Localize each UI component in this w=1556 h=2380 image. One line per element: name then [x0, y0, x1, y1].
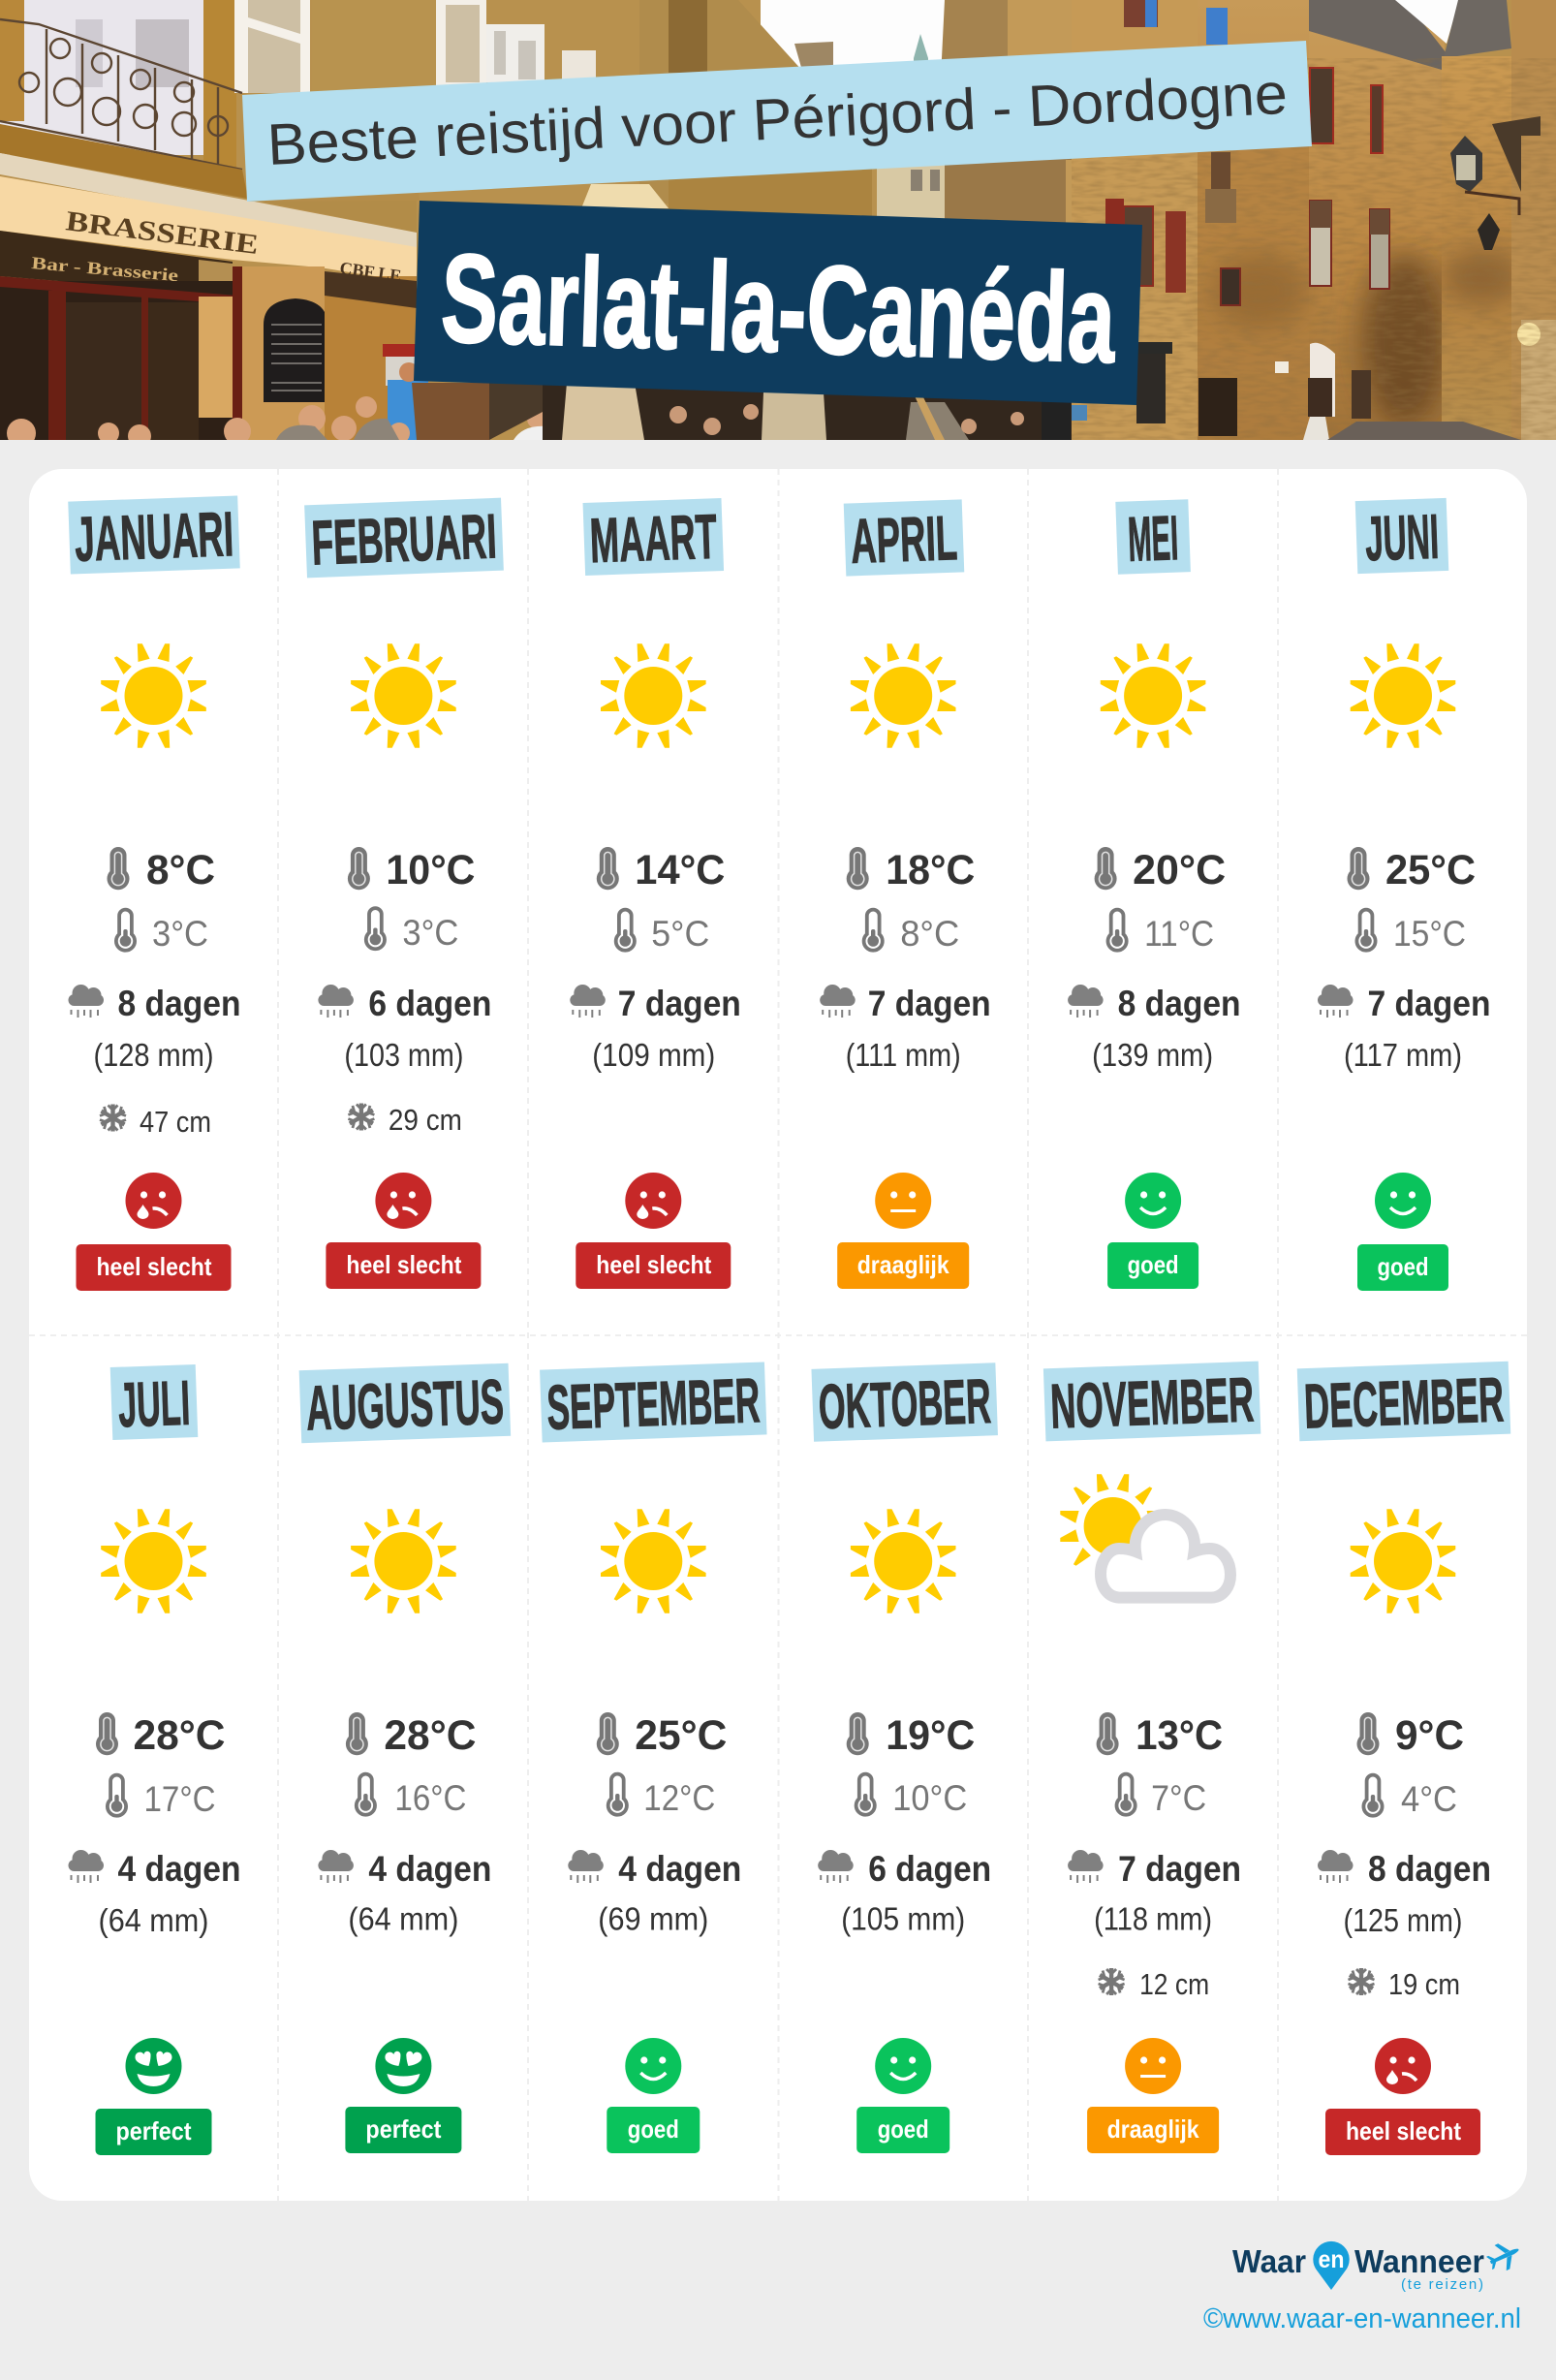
- rain days: [68, 1849, 240, 1889]
- heading: juni: JUNI: [1364, 501, 1440, 574]
- rainfall: (103 mm): [344, 1037, 463, 1073]
- rainfall: (105 mm): [841, 1901, 965, 1936]
- max temperature: 18°C: [886, 847, 975, 893]
- min temperature: 3°C: [152, 914, 208, 954]
- max temperature: 25°C: [635, 1712, 727, 1759]
- rating badge: heel slecht: [97, 1252, 212, 1281]
- min temperature: 7°C: [1151, 1778, 1206, 1818]
- max temperature: [1356, 1712, 1464, 1759]
- rain days: [68, 984, 240, 1023]
- rating badge: draaglijk: [1107, 2114, 1199, 2144]
- max temperature: 10°C: [386, 847, 475, 893]
- icon: sun: [1351, 1509, 1455, 1613]
- min temperature: [366, 908, 458, 953]
- rating badge: goed: [878, 2114, 929, 2144]
- max temperature: 13°C: [1136, 1712, 1223, 1759]
- month: april: [820, 499, 991, 1289]
- rain days: [1068, 984, 1241, 1023]
- title banner: [414, 201, 1142, 405]
- max temperature: 9°C: [1395, 1712, 1464, 1759]
- rating face: [1125, 1173, 1181, 1229]
- rating badge: [576, 1242, 731, 1289]
- snow: [1099, 1967, 1209, 2001]
- logo: Waar en Wanneer: [1232, 2237, 1525, 2293]
- heading: september: [540, 1362, 767, 1443]
- snow: [100, 1105, 211, 1139]
- rain days: 7 dagen: [618, 984, 741, 1023]
- heading: oktober: [811, 1362, 998, 1442]
- rain days: [820, 984, 991, 1023]
- month: augustus: [299, 1363, 511, 2153]
- rating face: [1125, 2038, 1181, 2094]
- rating badge: [1357, 1244, 1448, 1291]
- rating badge: [95, 2109, 211, 2155]
- rainfall: (64 mm): [99, 1902, 209, 1938]
- subtitle banner: [242, 41, 1312, 202]
- rating badge: [856, 2107, 949, 2153]
- min temperature: 3°C: [402, 913, 458, 953]
- rating badge: [1325, 2109, 1480, 2155]
- month: september: [540, 1362, 767, 2153]
- rain days: 8 dagen: [1118, 984, 1241, 1023]
- month: juni: [1318, 498, 1490, 1291]
- shop front: [0, 281, 242, 440]
- heading: maart: [583, 498, 724, 576]
- rating badge: goed: [1128, 1250, 1179, 1279]
- rating badge: perfect: [116, 2116, 192, 2145]
- min temperature: [864, 910, 959, 954]
- awning sub lettering: Bar - Brasserie: [31, 253, 179, 285]
- header photo: Sarlat street: CBF LE: [338, 258, 402, 286]
- rainfall: (117 mm): [1344, 1037, 1462, 1073]
- month: november: [1043, 1362, 1260, 2153]
- website credit: ©www.waar-en-wanneer.nl: [1203, 2303, 1521, 2334]
- rain days: 7 dagen: [1368, 984, 1490, 1023]
- rating face: [375, 1173, 431, 1229]
- rain days: 6 dagen: [868, 1849, 991, 1889]
- rating face: [625, 2038, 681, 2094]
- rainfall: (139 mm): [1092, 1037, 1213, 1073]
- sill and awning: [0, 124, 248, 199]
- min temperature: 17°C: [143, 1779, 215, 1819]
- min temperature: 5°C: [651, 914, 709, 954]
- max temperature: [1097, 1712, 1223, 1759]
- max temperature: [1347, 847, 1476, 893]
- icon: sun: [1101, 643, 1205, 748]
- rainfall: (69 mm): [598, 1901, 708, 1936]
- max temperature: [847, 847, 975, 893]
- max temperature: 25°C: [1385, 847, 1476, 893]
- icon: sun: [101, 1509, 206, 1613]
- min temperature: [616, 910, 709, 954]
- rain days: 4 dagen: [118, 1849, 240, 1889]
- rating face: [126, 1173, 182, 1229]
- max temperature: [107, 847, 215, 893]
- title text: Sarlat-la-Canéda: [439, 227, 1119, 390]
- min temperature: [856, 1774, 967, 1818]
- heading: januari: [68, 495, 240, 575]
- icon: sun: [601, 1509, 706, 1613]
- max temperature: 28°C: [384, 1712, 476, 1759]
- rain days: [1318, 984, 1490, 1023]
- min temperature: [357, 1774, 466, 1818]
- heading: juli: JULI: [117, 1367, 191, 1440]
- icon: sun behind cloud: [1060, 1474, 1230, 1598]
- header photo: Sarlat street: [0, 0, 1556, 448]
- stone texture: [1072, 58, 1556, 440]
- heading: november: NOVEMBER: [1049, 1363, 1255, 1442]
- heading: mei: [1115, 499, 1191, 575]
- sign lettering: BRASSERIE: [64, 205, 261, 261]
- max temperature: 19°C: [886, 1712, 975, 1759]
- balcony ironwork: [0, 19, 242, 170]
- min temperature: [1116, 1774, 1206, 1818]
- rating face: [1375, 2038, 1431, 2094]
- rain days: 4 dagen: [618, 1849, 741, 1889]
- rating badge: [1087, 2107, 1219, 2153]
- rating badge: perfect: [365, 2114, 442, 2144]
- icon: sun: [601, 643, 706, 748]
- icon: sun: [851, 1509, 955, 1613]
- heading: februari: FEBRUARI: [310, 500, 498, 579]
- heading: april: APRIL: [850, 502, 958, 577]
- min temperature: [1108, 910, 1214, 954]
- rain days: 8 dagen: [118, 984, 240, 1023]
- rating face: [1375, 1173, 1431, 1229]
- rating face: [875, 2038, 931, 2094]
- rating badge: heel slecht: [596, 1250, 712, 1279]
- snow: 29 cm: [389, 1103, 462, 1137]
- icon: sun: [1351, 643, 1455, 748]
- rainfall: (64 mm): [348, 1901, 458, 1936]
- rainfall: (128 mm): [93, 1037, 213, 1073]
- min temperature: [608, 1774, 715, 1818]
- rating face: [875, 1173, 931, 1229]
- rating face: [375, 2038, 431, 2094]
- min temperature: [1356, 910, 1466, 954]
- rain days: [570, 984, 741, 1023]
- month: december: [1297, 1362, 1510, 2155]
- heading: juli: [110, 1364, 198, 1441]
- month: maart: [570, 498, 741, 1289]
- rain days: [1318, 1849, 1491, 1889]
- snow: 19 cm: [1388, 1967, 1460, 2001]
- max temperature: [597, 847, 725, 893]
- right buildings: [1198, 0, 1309, 440]
- min temperature: 16°C: [394, 1778, 466, 1818]
- min temperature: 15°C: [1393, 914, 1466, 954]
- min temperature: 10°C: [892, 1778, 967, 1818]
- rain days: 7 dagen: [868, 984, 991, 1023]
- heading: november: [1043, 1362, 1260, 1442]
- min temperature: [1363, 1775, 1457, 1819]
- rain days: 6 dagen: [368, 984, 491, 1023]
- crowd left: [388, 380, 428, 440]
- lamps and overhang: [1450, 136, 1482, 192]
- rain days: 4 dagen: [368, 1849, 491, 1889]
- rain days: 8 dagen: [1368, 1849, 1491, 1889]
- heading: januari: JANUARI: [74, 498, 234, 575]
- heading: mei: MEI: [1127, 502, 1179, 575]
- rain days: [318, 984, 491, 1023]
- logo: Waar en Wanneer: Waar: [1232, 2243, 1306, 2279]
- rainfall: (111 mm): [846, 1037, 961, 1073]
- heading: maart: MAART: [589, 501, 718, 576]
- min temperature: 12°C: [643, 1778, 715, 1818]
- rain days: [1068, 1849, 1241, 1889]
- month: mei: [1068, 499, 1241, 1289]
- rating badge: [345, 2107, 461, 2153]
- rating badge: [326, 1242, 481, 1289]
- icon: sun: [351, 643, 456, 748]
- middle strip under banner: [248, 202, 254, 203]
- icon: sun: [101, 643, 206, 748]
- month: oktober: [811, 1362, 998, 2153]
- min temperature: [116, 910, 208, 954]
- snow: [348, 1103, 462, 1137]
- month: juli: [68, 1364, 240, 2155]
- rating badge: draaglijk: [857, 1250, 949, 1279]
- rain days: [568, 1849, 741, 1889]
- rating badge: [76, 1244, 231, 1291]
- month: januari: [68, 495, 240, 1291]
- month: februari: [304, 498, 504, 1289]
- min temperature: [108, 1775, 215, 1819]
- rating badge: goed: [1378, 1252, 1428, 1281]
- panel: monthly climate card: [29, 469, 1527, 2201]
- heading: april: [844, 499, 964, 577]
- heading: augustus: AUGUSTUS: [305, 1365, 505, 1444]
- rating badge: [607, 2107, 700, 2153]
- heading: oktober: OKTOBER: [818, 1365, 992, 1442]
- rating badge: goed: [628, 2114, 679, 2144]
- min temperature: 11°C: [1144, 914, 1214, 954]
- subtitle text: Beste reistijd voor Périgord - Dordogne: [265, 61, 1289, 177]
- max temperature: 28°C: [134, 1712, 225, 1759]
- heading: september: SEPTEMBER: [545, 1364, 762, 1443]
- heading: februari: [304, 498, 504, 579]
- rain days: [318, 1849, 491, 1889]
- max temperature: [847, 1712, 975, 1759]
- rating badge: heel slecht: [346, 1250, 462, 1279]
- logo: Waar en Wanneer: en: [1318, 2246, 1345, 2273]
- rating badge: heel slecht: [1346, 2116, 1461, 2145]
- logo: Waar en Wanneer: Wanneer: [1354, 2243, 1484, 2279]
- snow: 12 cm: [1139, 1967, 1209, 2001]
- max temperature: 20°C: [1133, 847, 1226, 893]
- rating face: [126, 2038, 182, 2094]
- max temperature: 8°C: [146, 847, 215, 893]
- min temperature: 8°C: [900, 914, 959, 954]
- heading: juni: [1355, 498, 1448, 575]
- rainfall: (125 mm): [1343, 1902, 1463, 1938]
- icon: sun: [351, 1509, 456, 1613]
- rating badge: [1107, 1242, 1198, 1289]
- max temperature: 14°C: [635, 847, 725, 893]
- rainfall: (118 mm): [1094, 1901, 1212, 1936]
- heading: augustus: [299, 1363, 511, 1444]
- rainfall: (109 mm): [592, 1037, 715, 1073]
- max temperature: [348, 847, 475, 893]
- rating badge: [837, 1242, 969, 1289]
- rain days: [818, 1849, 991, 1889]
- logo: Waar en Wanneer: (te reizen): [1401, 2276, 1483, 2293]
- windows right: [1124, 0, 1158, 27]
- snow: 47 cm: [140, 1105, 211, 1139]
- rain days: 7 dagen: [1118, 1849, 1241, 1889]
- min temperature: 4°C: [1401, 1779, 1457, 1819]
- snow: [1349, 1967, 1460, 2001]
- icon: sun: [851, 643, 955, 748]
- rating face: [625, 1173, 681, 1229]
